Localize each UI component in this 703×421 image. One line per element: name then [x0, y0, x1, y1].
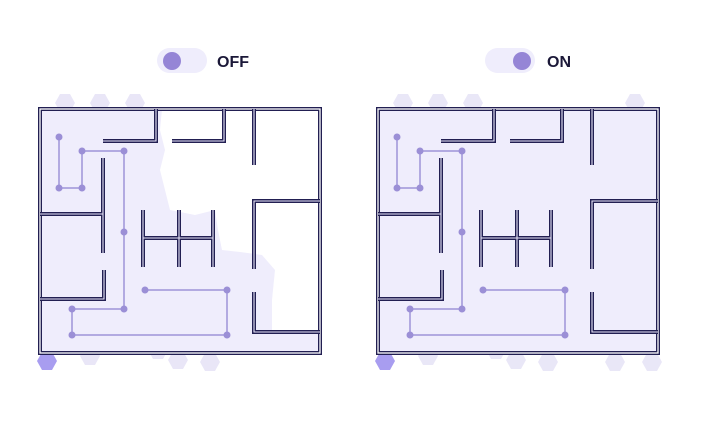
floor plan: on	[375, 94, 662, 371]
label: OFF: OFF	[217, 54, 249, 71]
toggle: on	[485, 48, 571, 73]
label: ON: ON	[547, 54, 571, 71]
floor plan: off	[37, 94, 320, 371]
toggle: off	[157, 48, 249, 73]
